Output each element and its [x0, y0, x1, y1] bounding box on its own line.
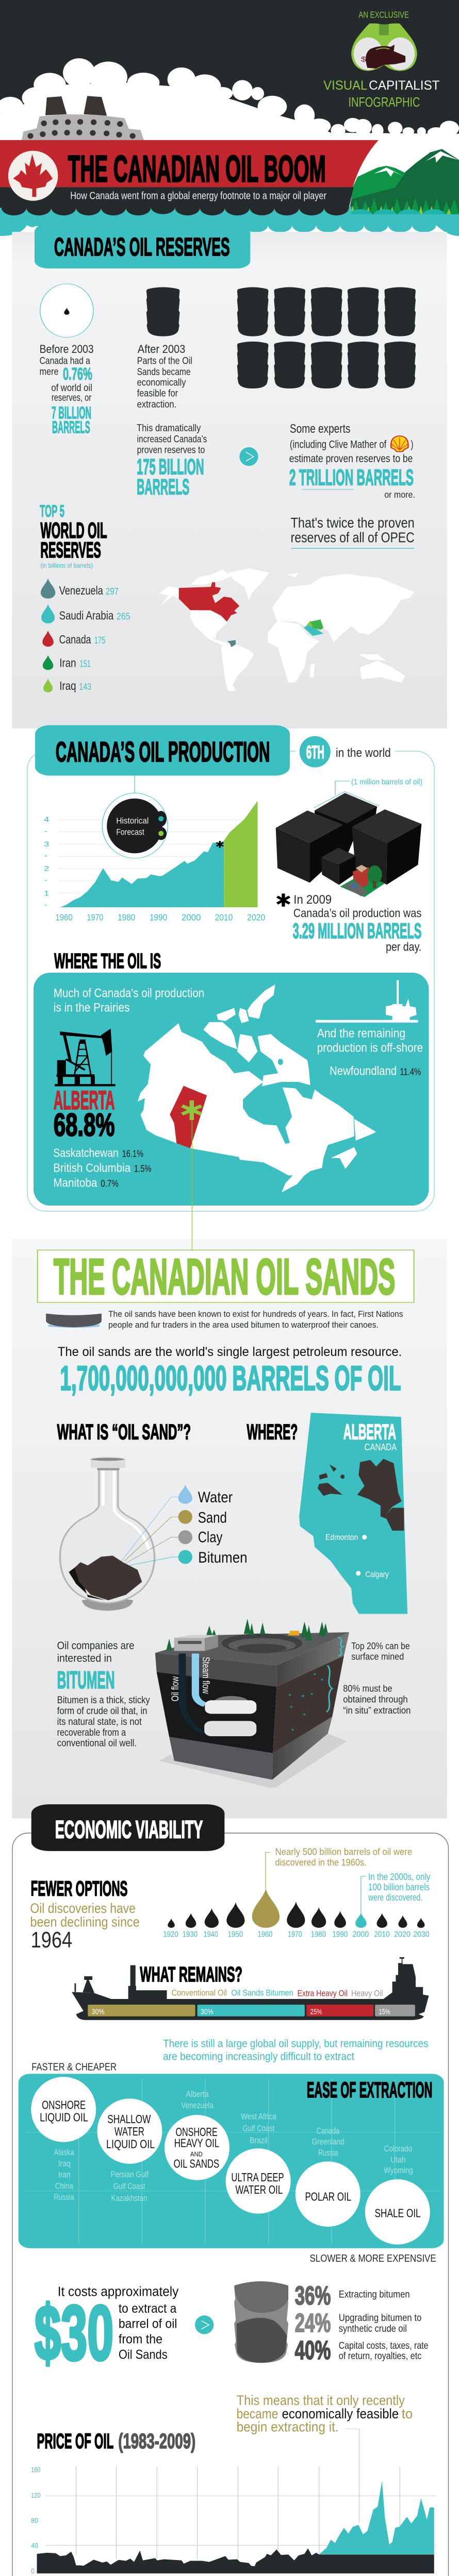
- illustration: barrel volume cubes and house: (1 million barrels of oil): [351, 777, 422, 786]
- text: before 2003: Canada had a: [40, 355, 90, 366]
- legend: oil sand components: Water: [198, 1489, 233, 1506]
- legend: historical and forecast: Forecast: [116, 827, 144, 837]
- chart: oil price area chart: 120: [31, 2492, 40, 2499]
- chart: production area chart: 1980: [118, 912, 135, 923]
- panel: ease of extraction: ULTRA DEEP: [231, 2171, 284, 2184]
- chart: production area chart: -: [44, 902, 47, 909]
- icon: barrels row two: [237, 342, 416, 388]
- text: extraction methods: “in situ” extraction: [343, 1705, 411, 1716]
- chart: production area chart: 2010: [215, 912, 233, 923]
- text: some experts: [289, 422, 415, 500]
- text: extraction methods: obtained through: [343, 1694, 408, 1705]
- chart: production area chart: 4: [44, 816, 49, 823]
- stat: $30 per barrel: to extract a: [119, 2301, 176, 2316]
- panel: ease of extraction: SHALE OIL: [375, 2207, 421, 2219]
- text: after 2003: increased Canada’s: [137, 433, 207, 445]
- icon: barrels row one: [237, 287, 416, 336]
- text: extraction methods: surface mined: [351, 1651, 404, 1662]
- clouds: [0, 58, 459, 152]
- text: after 2003: This dramatically: [137, 422, 201, 433]
- panel: canada's oil reserves: [12, 224, 447, 728]
- panel: ease of extraction: Gulf Coast: [113, 2182, 145, 2191]
- heading tab: [31, 1804, 224, 1851]
- legend: top five countries: 151: [79, 658, 91, 669]
- chart: barrel cost breakdown: synthetic crude oil: [339, 2323, 407, 2334]
- chart: discoveries by decade: 1940: [203, 1930, 218, 1939]
- icon: ship: [21, 96, 144, 141]
- panel: ease of extraction: Colorado: [384, 2144, 412, 2154]
- legend: top five countries: Venezuela: [59, 584, 103, 597]
- legend: top five countries: 297: [106, 586, 119, 597]
- panel: ease of extraction: Persian Gulf: [111, 2170, 149, 2179]
- chart: discoveries by decade: 1970: [288, 1930, 302, 1939]
- panel: ease of extraction: HEAVY OIL: [174, 2137, 219, 2150]
- chart: what remains tanker: Heavy Oil: [351, 1989, 383, 1998]
- panel: ease of extraction: Russia: [318, 2148, 338, 2158]
- text: before 2003: of world oil: [51, 382, 92, 393]
- panel: ease of extraction: LIQUID OIL: [106, 2138, 155, 2151]
- map: canada: [138, 985, 376, 1250]
- chart: production area chart: -: [44, 876, 47, 884]
- chart: oil price area chart: 80: [31, 2517, 38, 2524]
- chart: production area chart: 3: [44, 841, 49, 849]
- text: after 2003: proven reserves to: [137, 444, 205, 455]
- chart: production area chart: 1960: [55, 912, 73, 923]
- stat: $30 per barrel: $30: [35, 2289, 113, 2376]
- text: bitumen definition: conventional oil well.: [57, 1737, 137, 1749]
- text: some experts: ): [411, 438, 413, 451]
- map: alberta deposits: CANADA: [365, 1442, 397, 1452]
- text: offshore note: Newfoundland: [330, 1064, 397, 1078]
- icon: pumpjack: [55, 1029, 116, 1086]
- list: other provinces: [53, 1146, 151, 1190]
- legend: top five countries: Iraq: [59, 680, 76, 692]
- panel: economic viability: ECONOMIC VIABILITY: [55, 1816, 203, 1844]
- chart: production area chart: 1: [44, 890, 49, 897]
- list: other provinces: 16.1%: [122, 1148, 143, 1159]
- chart: discoveries by decade: 1990: [332, 1930, 348, 1939]
- chart: what remains tanker: WHAT REMAINS?: [140, 1963, 242, 1986]
- text: bitumen definition: BITUMEN: [57, 1666, 114, 1693]
- panel: ease of extraction: SHALLOW: [107, 2113, 151, 2126]
- panel: the canadian oil sands: [12, 1239, 447, 1819]
- panel: economic viability: [12, 1804, 449, 2576]
- text: after 2003: Sands became: [137, 366, 191, 377]
- panel: canada's oil reserves: WORLD OIL: [40, 518, 107, 543]
- panel: economic viability: (1983-2009): [118, 2430, 195, 2453]
- logo: exclusive badge: AN EXCLUSIVE: [358, 10, 409, 20]
- text: bitumen definition: [57, 1640, 150, 1749]
- map: alberta deposits: Calgary: [365, 1570, 389, 1579]
- legend: top five countries: 265: [117, 611, 130, 622]
- chart: what remains tanker: 25%: [310, 2007, 322, 2016]
- chart: oil price area chart: 160: [31, 2467, 40, 2474]
- text: before 2003: mere: [40, 366, 59, 377]
- text: economically feasible note: [237, 2392, 413, 2522]
- panel: canada's oil reserves: RESERVES: [40, 537, 101, 562]
- chart: what remains tanker: Conventional Oil: [172, 1988, 227, 1998]
- text: after 2003: Parts of the Oil: [137, 355, 192, 366]
- text: extraction methods: 80% must be: [343, 1683, 392, 1694]
- chart: production area chart: -: [44, 827, 47, 835]
- text: before 2003: [40, 343, 94, 437]
- chart: discoveries by decade: 1930: [183, 1930, 198, 1939]
- icon: offshore rig: [316, 980, 418, 1023]
- text: after 2003: [137, 343, 207, 499]
- panel: ease of extraction: Alberta: [186, 2090, 209, 2099]
- label: faster and cheaper: FASTER & CHEAPER: [31, 2061, 117, 2073]
- text: offshore note: And the remaining: [317, 1026, 405, 1040]
- dark scalloped band: [0, 187, 354, 215]
- list: other provinces: 0.7%: [101, 1178, 119, 1189]
- panel: the canadian oil sands: WHERE?: [247, 1420, 298, 1444]
- chart: discoveries by decade: 1920: [163, 1930, 178, 1939]
- text: history: [108, 1310, 403, 1330]
- heading: top 5 world oil reserves: (in billions of barrels): [40, 562, 93, 569]
- panel: canada's oil reserves: 0.76%: [63, 365, 92, 384]
- text: prairies note: is in the Prairies: [54, 1001, 129, 1014]
- legend: top five countries: 143: [79, 681, 91, 692]
- chart: discoveries by decade: 1960: [257, 1930, 272, 1939]
- text: supply note: [163, 2038, 428, 2063]
- text: after 2003: economically: [137, 377, 186, 388]
- chart: discoveries by decade: 2010: [374, 1930, 389, 1939]
- panel: ease of extraction: Russia: [54, 2193, 74, 2202]
- panel: canada's oil reserves: BARRELS: [137, 475, 189, 499]
- badge: 6th in the world: [300, 736, 391, 768]
- panel: economic viability: FEWER OPTIONS: [31, 1877, 127, 1901]
- title banner: [0, 140, 379, 187]
- logo: exclusive badge: VISUAL: [323, 78, 367, 93]
- arrow: [239, 447, 258, 466]
- badge: 6th in the world: in the world: [336, 746, 391, 760]
- stat: $30 per barrel: from the: [119, 2332, 162, 2347]
- panel: ease of extraction: POLAR OIL: [305, 2190, 351, 2203]
- chart: production area chart: 1990: [150, 912, 167, 923]
- panel: the canadian oil sands: WHAT IS “OIL SAND”?: [57, 1420, 191, 1444]
- chart: barrel cost breakdown: Extracting bitumen: [339, 2289, 410, 2300]
- panel: ease of extraction: China: [55, 2181, 73, 2191]
- panel: ease of extraction: WATER: [114, 2125, 144, 2138]
- text: extraction methods: Top 20% can be: [351, 1640, 410, 1651]
- text: after 2003: extraction.: [137, 398, 176, 410]
- illustration: oil sands block diagram: Steam flow: [200, 1657, 211, 1694]
- chart: production area chart: 2: [44, 865, 49, 873]
- chart: barrel cost breakdown: 40%: [295, 2336, 331, 2365]
- illustration: barrel volume cubes and house: [276, 777, 422, 897]
- text: 2009 production: per day.: [386, 940, 421, 953]
- heading: top 5 world oil reserves: [40, 502, 107, 569]
- heading: top 5 world oil reserves: TOP 5: [40, 502, 64, 521]
- chart: discoveries by decade: 2000: [352, 1930, 369, 1939]
- text: some experts: or more.: [384, 490, 415, 500]
- chart: discoveries by decade: 1980: [311, 1930, 326, 1939]
- panel: canada's oil reserves: BARRELS: [52, 418, 90, 437]
- panel: ease of extraction: Utah: [390, 2155, 406, 2165]
- icon: shell logo: [391, 436, 408, 451]
- stat: $30 per barrel: barrel of oil: [119, 2317, 177, 2331]
- legend: top five countries: 175: [94, 635, 105, 646]
- stat: alberta share: 68.8%: [54, 1107, 114, 1143]
- text: 2009 production: [277, 893, 421, 953]
- stat: alberta share: [54, 1086, 114, 1143]
- text: before 2003: reserves, or: [52, 392, 91, 403]
- map: alberta deposits: [299, 1413, 407, 1614]
- panel: ease of extraction: Greenland: [312, 2137, 344, 2147]
- panel: ease of extraction: Alaska: [54, 2148, 74, 2157]
- text: prairies note: Much of Canada's oil production: [54, 986, 204, 999]
- legend: top five countries: [41, 578, 130, 692]
- text: some experts: Some experts: [290, 422, 350, 436]
- chart: what remains tanker: Extra Heavy Oil: [298, 1989, 348, 1998]
- illustration: mountains and trees: [348, 149, 459, 222]
- panel: ease of extraction: Canada: [317, 2126, 340, 2136]
- panel: ease of extraction: Kazakhstan: [111, 2193, 147, 2203]
- panel: ease of extraction: West Africa: [241, 2112, 276, 2122]
- chart: oil price area chart: 0: [31, 2568, 35, 2575]
- text: 2009 production: In 2009: [293, 893, 332, 907]
- icon: maple leaf badge: [8, 151, 58, 201]
- legend: oil sand components: Bitumen: [198, 1549, 248, 1566]
- chart: what remains tanker: Oil Sands Bitumen: [231, 1988, 293, 1998]
- text: fewer options: Oil discoveries have: [30, 1901, 136, 1916]
- callout: 1960s: discovered in the 1960s.: [275, 1857, 367, 1868]
- header: sky, ship, title banner and mountains: [0, 0, 459, 236]
- text: bitumen definition: interested in: [57, 1652, 112, 1665]
- chart: production area chart: -: [44, 852, 47, 860]
- text: fewer options: been declining since: [30, 1914, 140, 1929]
- callout: 1960s: [266, 1846, 412, 1888]
- list: other provinces: British Columbia: [53, 1161, 131, 1174]
- icon: single drop in oval: [40, 284, 93, 337]
- illustration: flask of oil sand: [60, 1458, 155, 1611]
- chart: production area chart: 1970: [87, 912, 103, 923]
- text: bitumen definition: its natural state, is not: [57, 1716, 142, 1727]
- arrow: [195, 2315, 214, 2334]
- chart: discoveries by decade: [163, 1888, 430, 1939]
- text: prairies note: [54, 986, 204, 1014]
- chart: discoveries by decade: 2020: [394, 1930, 411, 1939]
- stat: $30 per barrel: It costs approximately: [58, 2284, 179, 2299]
- illustration: oil sands block diagram: Oil flow: [170, 1676, 181, 1701]
- panel: canada's oil production: [27, 725, 434, 1250]
- panel: ease of extraction: Venezuela: [181, 2101, 214, 2110]
- panel: ease of extraction: Wyoming: [384, 2166, 413, 2175]
- text: before 2003: Before 2003: [40, 343, 94, 355]
- text: offshore note: [317, 1026, 423, 1078]
- panel: ease of extraction: [19, 2074, 444, 2248]
- text: economically feasible note: became: [237, 2405, 278, 2421]
- list: other provinces: 1.5%: [134, 1163, 151, 1174]
- panel: ease of extraction: AND: [190, 2151, 203, 2158]
- heading tab: [35, 725, 290, 776]
- chart: barrel cost breakdown: [234, 2281, 428, 2365]
- chart: barrel cost breakdown: 24%: [295, 2308, 331, 2337]
- icon: canoe: [46, 1314, 102, 1328]
- chart: what remains tanker: [72, 1957, 429, 2020]
- text: bitumen definition: Oil companies are: [57, 1640, 135, 1652]
- text: economically feasible note: to: [402, 2405, 413, 2421]
- legend: top five countries: Canada: [59, 633, 91, 646]
- text: economically feasible note: economically feasible: [282, 2405, 399, 2421]
- legend: historical and forecast: [102, 793, 168, 858]
- callout: 2000s: [361, 1871, 430, 1913]
- panel: ease of extraction: Iran: [58, 2170, 71, 2180]
- legend: top five countries: Iran: [59, 656, 76, 670]
- panel: ease of extraction: ONSHORE: [176, 2126, 218, 2139]
- list: other provinces: Saskatchewan: [53, 1146, 119, 1160]
- chart: barrel cost breakdown: 36%: [295, 2281, 331, 2310]
- chart: production area chart: 2000: [182, 912, 201, 923]
- map: alberta deposits: Edmonton: [325, 1533, 358, 1542]
- text: bitumen definition: Bitumen is a thick, sticky: [57, 1694, 150, 1705]
- text: some experts: (including Clive Mather of: [290, 438, 386, 451]
- text: extraction methods: [343, 1640, 411, 1716]
- chart: what remains tanker: 30%: [92, 2007, 105, 2016]
- badge: 6th in the world: 6TH: [306, 742, 324, 762]
- panel: ease of extraction: LIQUID OIL: [40, 2111, 88, 2124]
- callout: twice opec: [291, 515, 415, 548]
- panel: canada's oil reserves: 175 BILLION: [137, 454, 204, 479]
- legend: historical and forecast: Historical: [116, 816, 149, 826]
- text: fewer options: 1964: [31, 1927, 72, 1953]
- chart: oil price area chart: [29, 2467, 436, 2576]
- chart: production area chart: 2020: [247, 912, 265, 923]
- legend: top five countries: Saudi Arabia: [59, 609, 114, 622]
- connector line: [134, 776, 135, 793]
- heading tab: [35, 224, 250, 268]
- chart: world map: [159, 568, 414, 691]
- chart: what remains tanker: 30%: [201, 2007, 214, 2016]
- heading: price of oil: PRICE OF OIL: [37, 2430, 113, 2453]
- text: bitumen definition: form of crude oil that, in: [57, 1705, 147, 1716]
- legend: oil sand components: Sand: [198, 1509, 227, 1526]
- panel: ease of extraction: ONSHORE: [42, 2098, 86, 2112]
- legend: oil sand components: Clay: [198, 1529, 223, 1546]
- list: other provinces: Manitoba: [53, 1176, 97, 1190]
- panel: ease of extraction: Gulf Coast: [243, 2124, 275, 2133]
- text: offshore note: 11.4%: [400, 1066, 421, 1077]
- text: after 2003: After 2003: [138, 343, 185, 355]
- panel: canada's oil production: ALBERTA: [54, 1086, 114, 1115]
- illustration: oil sands block diagram: [155, 1619, 349, 1788]
- panel: ease of extraction: Brazil: [250, 2136, 268, 2145]
- text: bitumen definition: recoverable from a: [57, 1726, 126, 1738]
- panel: canada's oil reserves: 7 BILLION: [52, 404, 91, 422]
- text: supply note: are becoming increasingly difficult to extract: [163, 2050, 354, 2063]
- panel: ease of extraction: WATER OIL: [235, 2183, 283, 2196]
- panel: ease of extraction: OIL SANDS: [174, 2157, 219, 2171]
- chart: discoveries by decade: 2030: [413, 1930, 430, 1939]
- logo: exclusive badge: [323, 10, 440, 110]
- chart: what remains tanker: 15%: [379, 2007, 390, 2016]
- stat: $30 per barrel: Oil Sands: [119, 2347, 168, 2362]
- panel: ease of extraction: Iraq: [58, 2159, 71, 2168]
- text: economically feasible note: begin extracting it.: [237, 2419, 339, 2435]
- chart: discoveries by decade: 1950: [228, 1930, 243, 1939]
- chart: oil price area chart: 40: [31, 2543, 38, 2550]
- teal wave band: [0, 207, 459, 236]
- icon: one barrel: [146, 287, 180, 336]
- chart: production area chart: [44, 801, 265, 923]
- legend: oil sand components: [122, 1484, 248, 1566]
- text: after 2003: feasible for: [137, 387, 178, 399]
- panel: canada's oil production: WHERE THE OIL IS: [54, 950, 161, 973]
- text: fewer options: [30, 1877, 140, 1953]
